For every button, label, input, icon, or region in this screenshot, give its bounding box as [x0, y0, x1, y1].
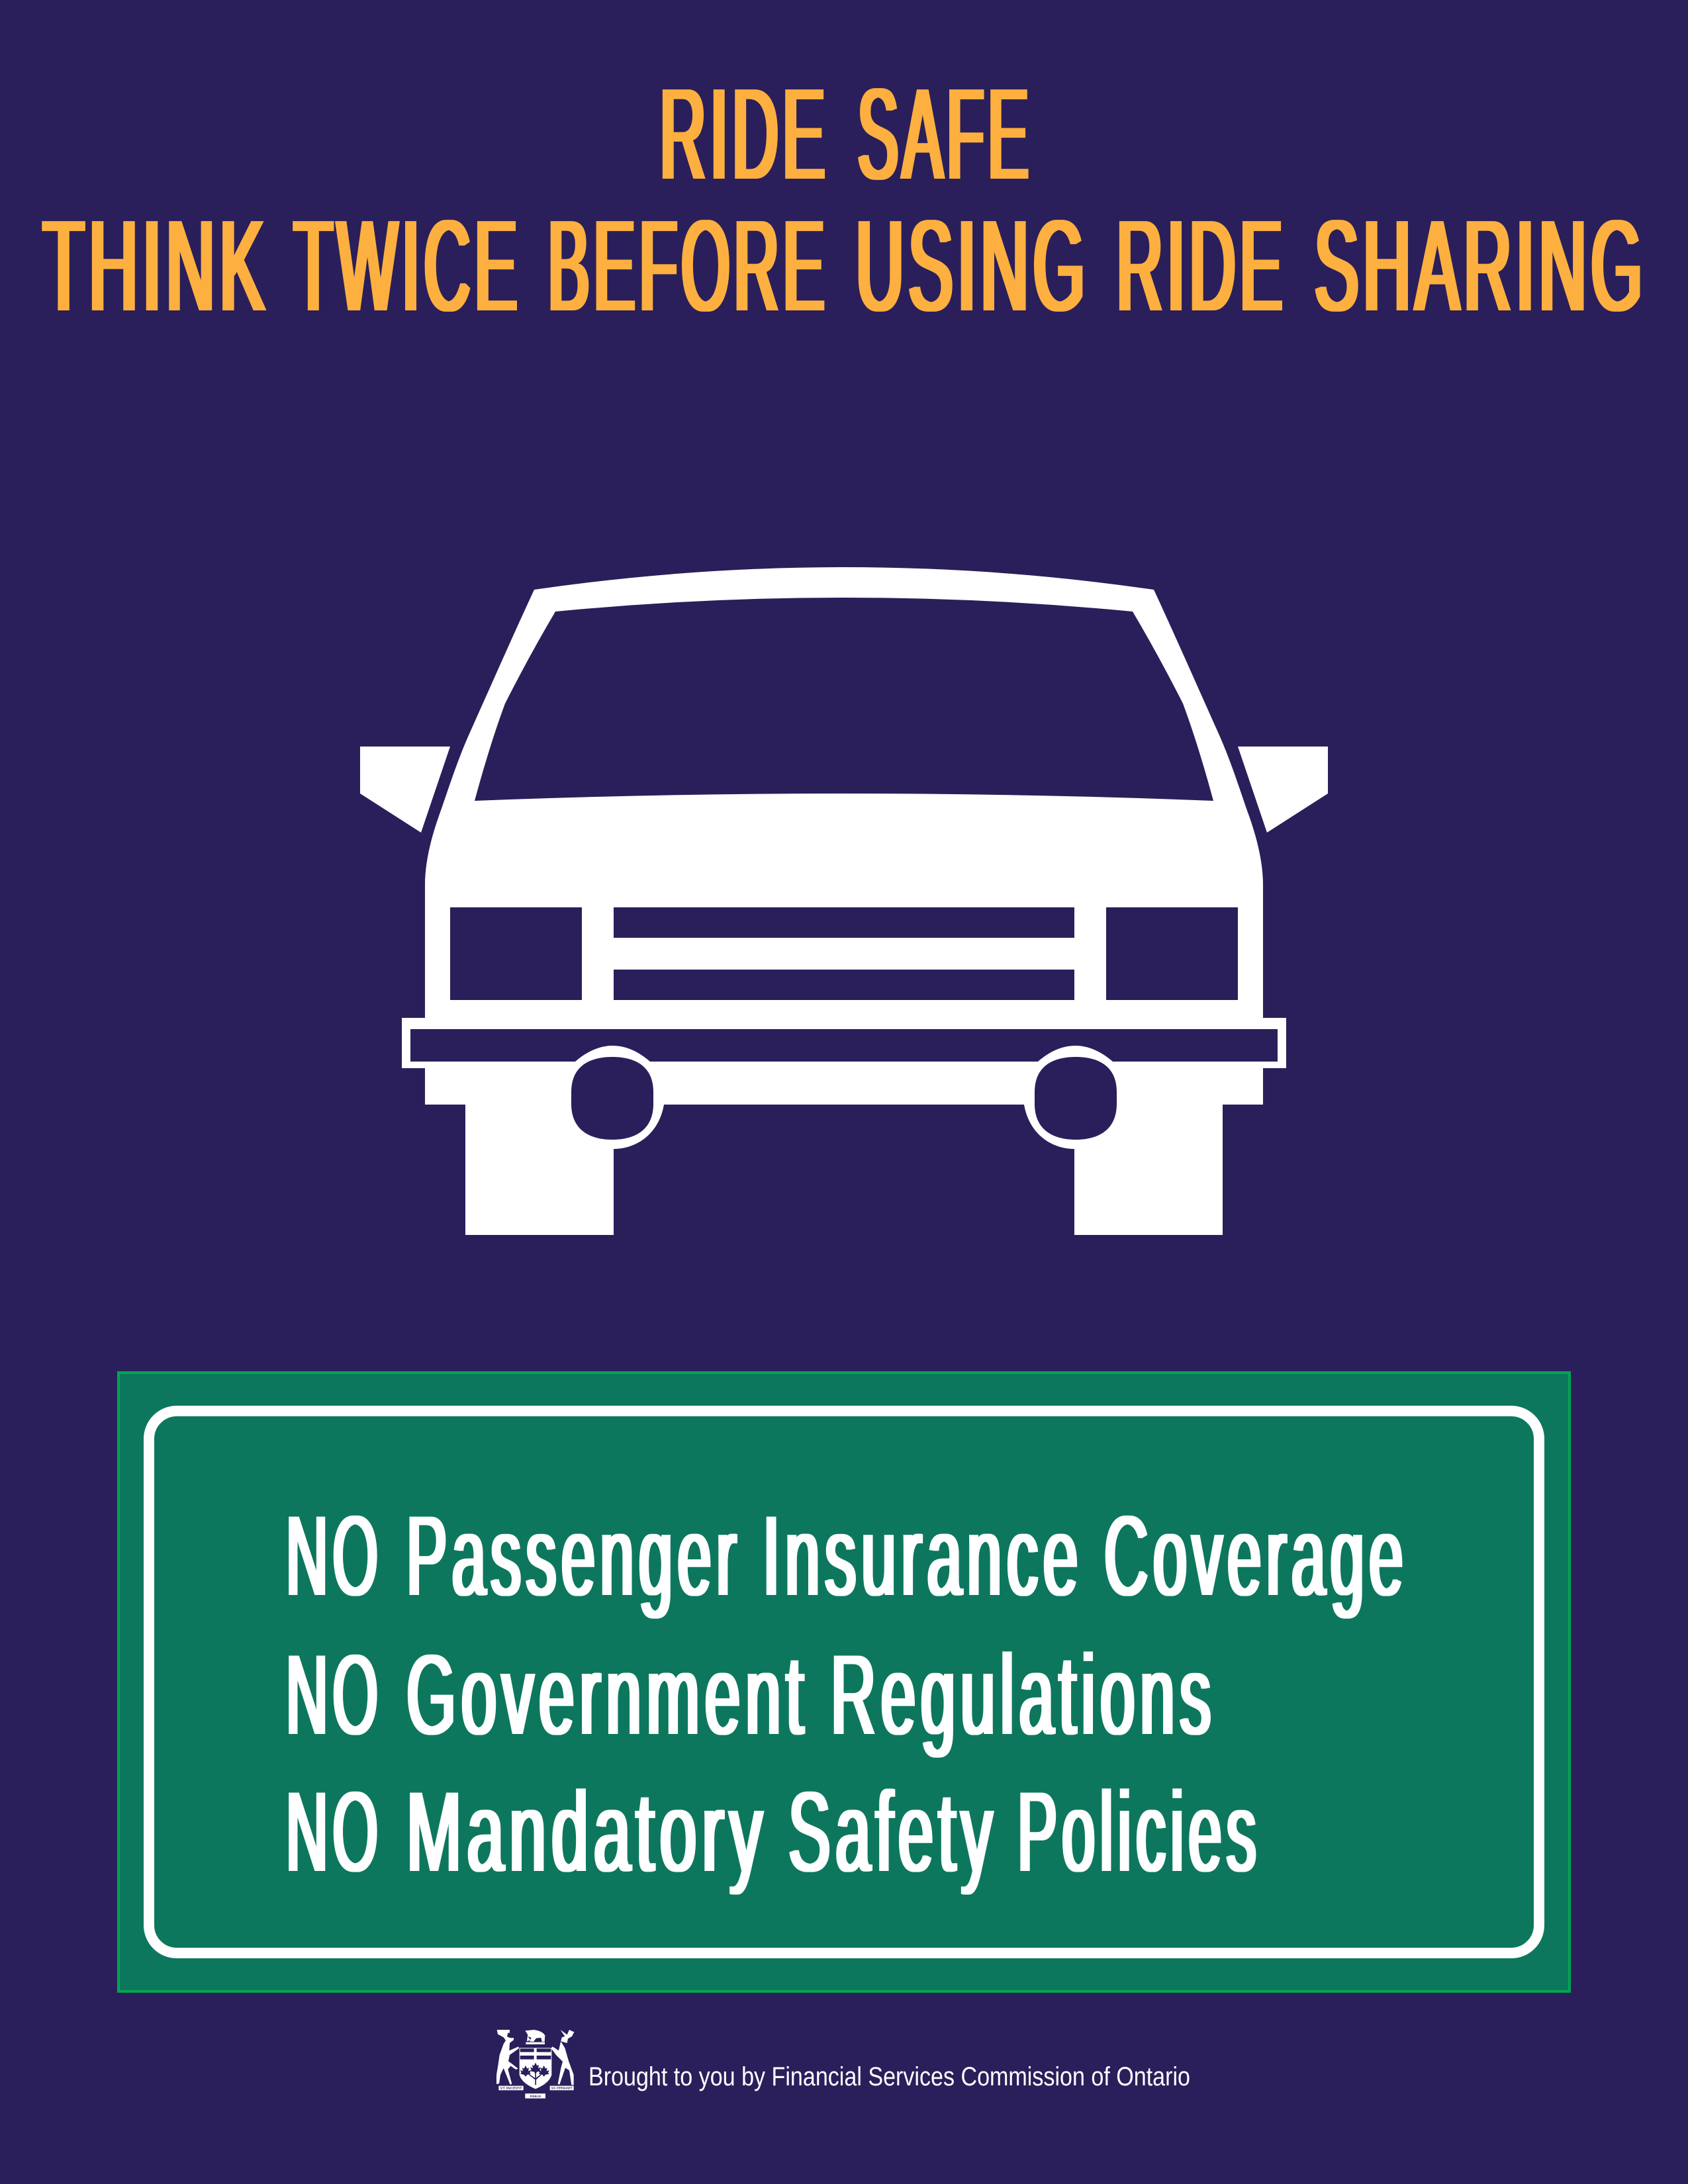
- right fog lamp ring: [1024, 1046, 1125, 1149]
- title: THINK: [43, 193, 269, 338]
- left headlight: [450, 907, 582, 1000]
- shield: [520, 2048, 551, 2089]
- lower grille bar: [614, 970, 1074, 1000]
- sign background: [118, 1373, 1570, 1991]
- title: USING: [856, 193, 1090, 338]
- left fog lamp ring: [563, 1046, 664, 1149]
- right headlight: [1106, 907, 1238, 1000]
- text: warning list: Insurance: [763, 1492, 1083, 1619]
- text: warning list: NO: [286, 1492, 383, 1619]
- text: warning list: Mandatory: [406, 1768, 768, 1895]
- title: TWICE: [294, 193, 522, 338]
- icon: Ontario coat of arms: VT INCEPIT: [500, 2087, 522, 2090]
- text: warning list: Safety: [788, 1768, 998, 1895]
- text: warning list: NO: [286, 1631, 383, 1758]
- text: warning list: [286, 1492, 1408, 1895]
- car body: [402, 567, 1286, 1235]
- icon: left mirror: [360, 747, 450, 833]
- icon: Ontario coat of arms: [496, 2030, 574, 2099]
- left moose: [496, 2030, 519, 2085]
- maple leaves: [520, 2063, 549, 2085]
- text: footer credit: Brought to you by Financial Services Commission of Ontario: [588, 2062, 1190, 2091]
- windshield: [475, 598, 1213, 801]
- title: [43, 62, 1647, 338]
- title: BEFORE: [548, 193, 829, 338]
- panel: green road sign: [118, 1373, 1570, 1991]
- text: warning list: Policies: [1017, 1768, 1261, 1895]
- bumper slot: [410, 1029, 1278, 1062]
- title: RIDE: [660, 62, 829, 206]
- title: SAFE: [858, 62, 1033, 206]
- left fog lamp: [571, 1057, 653, 1140]
- text: warning list: Regulations: [831, 1631, 1216, 1758]
- icon: Ontario coat of arms: FIDELIS: [530, 2095, 541, 2098]
- text: warning list: Government: [406, 1631, 809, 1758]
- icon: right mirror: [1238, 747, 1328, 833]
- icon: Ontario coat of arms: SIC PERMANET: [551, 2087, 573, 2090]
- sign inner white border: [149, 1411, 1539, 1953]
- text: warning list: Coverage: [1104, 1492, 1408, 1619]
- upper grille bar: [614, 907, 1074, 938]
- text: warning list: NO: [286, 1768, 383, 1895]
- text: warning list: Passenger: [406, 1492, 741, 1619]
- motto banners: [498, 2086, 524, 2090]
- icon: car front view: [360, 567, 1328, 1235]
- right fog lamp: [1035, 1057, 1117, 1140]
- title: RIDE: [1117, 193, 1287, 338]
- bear crest: [525, 2030, 545, 2042]
- right deer: [551, 2030, 574, 2085]
